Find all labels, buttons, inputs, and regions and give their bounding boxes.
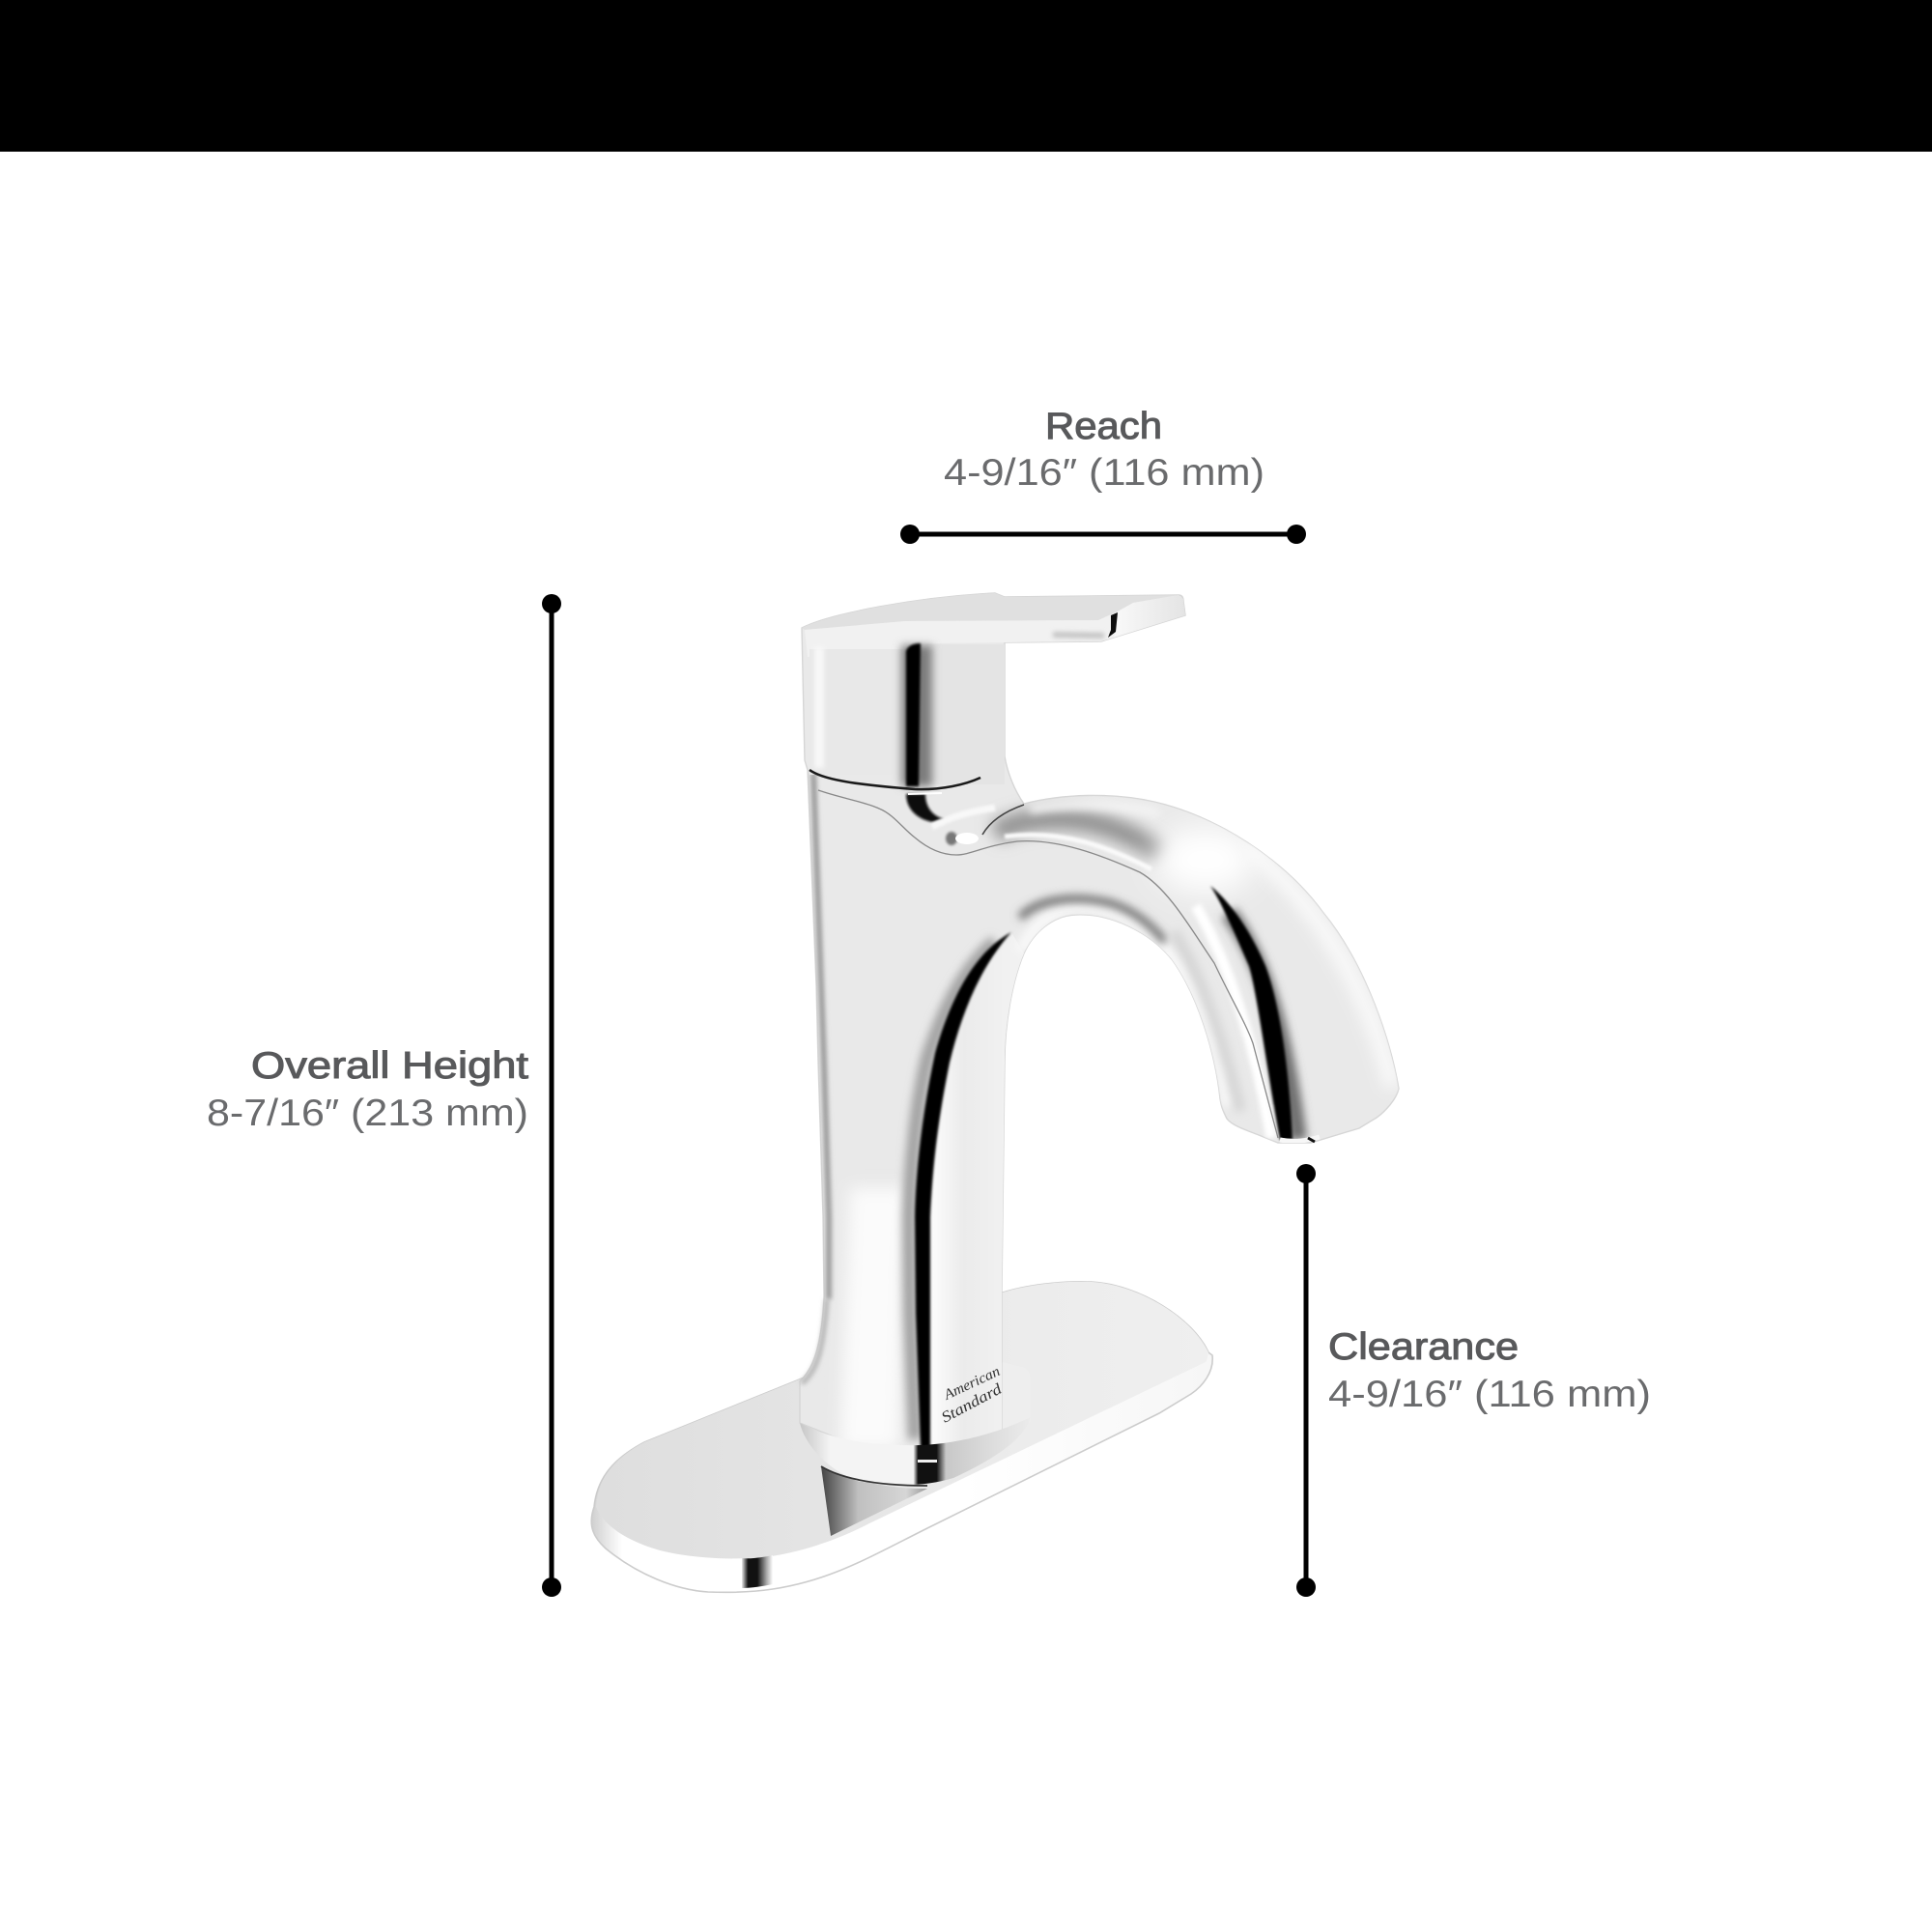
height line bbox=[549, 604, 554, 1587]
panel beside arch bbox=[930, 932, 1024, 1449]
stem stripe bbox=[906, 643, 921, 786]
stem right tone bbox=[1005, 644, 1006, 758]
collar underside bbox=[821, 1466, 927, 1486]
nozzle rim bbox=[1280, 1137, 1320, 1141]
reach left dot bbox=[900, 525, 920, 544]
arch top shadow bbox=[1020, 898, 1165, 942]
height top dot bbox=[542, 594, 561, 613]
dimension: overall height bbox=[207, 594, 561, 1597]
arc stripe bbox=[915, 932, 1011, 1449]
dimension: clearance bbox=[1296, 1164, 1651, 1597]
handle tip face bbox=[1114, 595, 1185, 638]
neck blob bbox=[906, 794, 945, 822]
plate reflection bbox=[821, 1466, 927, 1536]
header band bbox=[0, 0, 1932, 152]
nozzle dark mark bbox=[1308, 1138, 1315, 1142]
neck lower light bbox=[932, 808, 995, 827]
spout outer edge light bbox=[1246, 845, 1393, 1087]
spout dark stripe bbox=[1210, 886, 1293, 1140]
handle top face bbox=[802, 593, 1179, 630]
notch shade bbox=[946, 832, 957, 845]
spout top lip light bbox=[1030, 805, 1159, 813]
handle lip shadow bbox=[1053, 635, 1104, 636]
reach value: 4-9/16″ (116 mm) bbox=[944, 452, 1264, 494]
stem left tone bbox=[810, 649, 902, 775]
collar logo bbox=[939, 1364, 1006, 1427]
stripe left soft shade bbox=[909, 942, 995, 1439]
metal silhouette bbox=[800, 593, 1399, 1449]
reach line bbox=[910, 531, 1296, 537]
stem left highlight bbox=[814, 647, 824, 768]
spout highlight bbox=[1155, 827, 1256, 893]
spout upper band bbox=[995, 819, 1159, 855]
collar left shade bbox=[802, 1299, 827, 1383]
faucet deck plate bbox=[591, 1282, 1212, 1592]
body left edge shade bbox=[813, 773, 829, 1299]
strip above seam bbox=[1005, 835, 1151, 869]
logo word two: Standard bbox=[939, 1380, 1006, 1427]
plate top face bbox=[596, 1282, 1208, 1558]
height bottom dot bbox=[542, 1577, 561, 1597]
body light zone bbox=[840, 1188, 908, 1449]
collar band gap bbox=[918, 1460, 937, 1463]
notch light bbox=[955, 833, 979, 844]
ring seam bbox=[810, 770, 980, 789]
collar right side bbox=[1002, 1362, 1031, 1432]
neck crease bbox=[982, 805, 1024, 835]
logo word one: American bbox=[941, 1364, 1003, 1404]
seam line bbox=[818, 790, 1278, 1138]
clearance line bbox=[1304, 1174, 1308, 1587]
height label: Overall Height bbox=[251, 1045, 528, 1087]
clearance label: Clearance bbox=[1328, 1326, 1519, 1368]
light strip left of stripe bbox=[1196, 906, 1271, 1138]
faucet collar bbox=[800, 1299, 1031, 1486]
reach label: Reach bbox=[1045, 406, 1162, 447]
plate edge bbox=[591, 1282, 1212, 1592]
clearance value: 4-9/16″ (116 mm) bbox=[1328, 1374, 1651, 1415]
clearance top dot bbox=[1296, 1164, 1316, 1183]
handle slash bbox=[1108, 612, 1118, 638]
arch band tone bbox=[1174, 932, 1240, 1111]
arch edge light bbox=[1020, 906, 1229, 1106]
handle front lip bbox=[815, 620, 1114, 642]
plate edge specular bbox=[742, 1555, 773, 1588]
stem stripe soft bbox=[901, 645, 932, 786]
stripe right soft shade bbox=[1229, 913, 1298, 1140]
collar band bbox=[800, 1417, 1031, 1485]
reach right dot bbox=[1287, 525, 1306, 544]
metal shading bbox=[802, 593, 1393, 1449]
faucet body and spout bbox=[800, 593, 1399, 1449]
height value: 8-7/16″ (213 mm) bbox=[207, 1093, 528, 1134]
dimension: reach bbox=[900, 406, 1306, 544]
clearance bottom dot bbox=[1296, 1577, 1316, 1597]
ring gap bbox=[908, 793, 942, 794]
